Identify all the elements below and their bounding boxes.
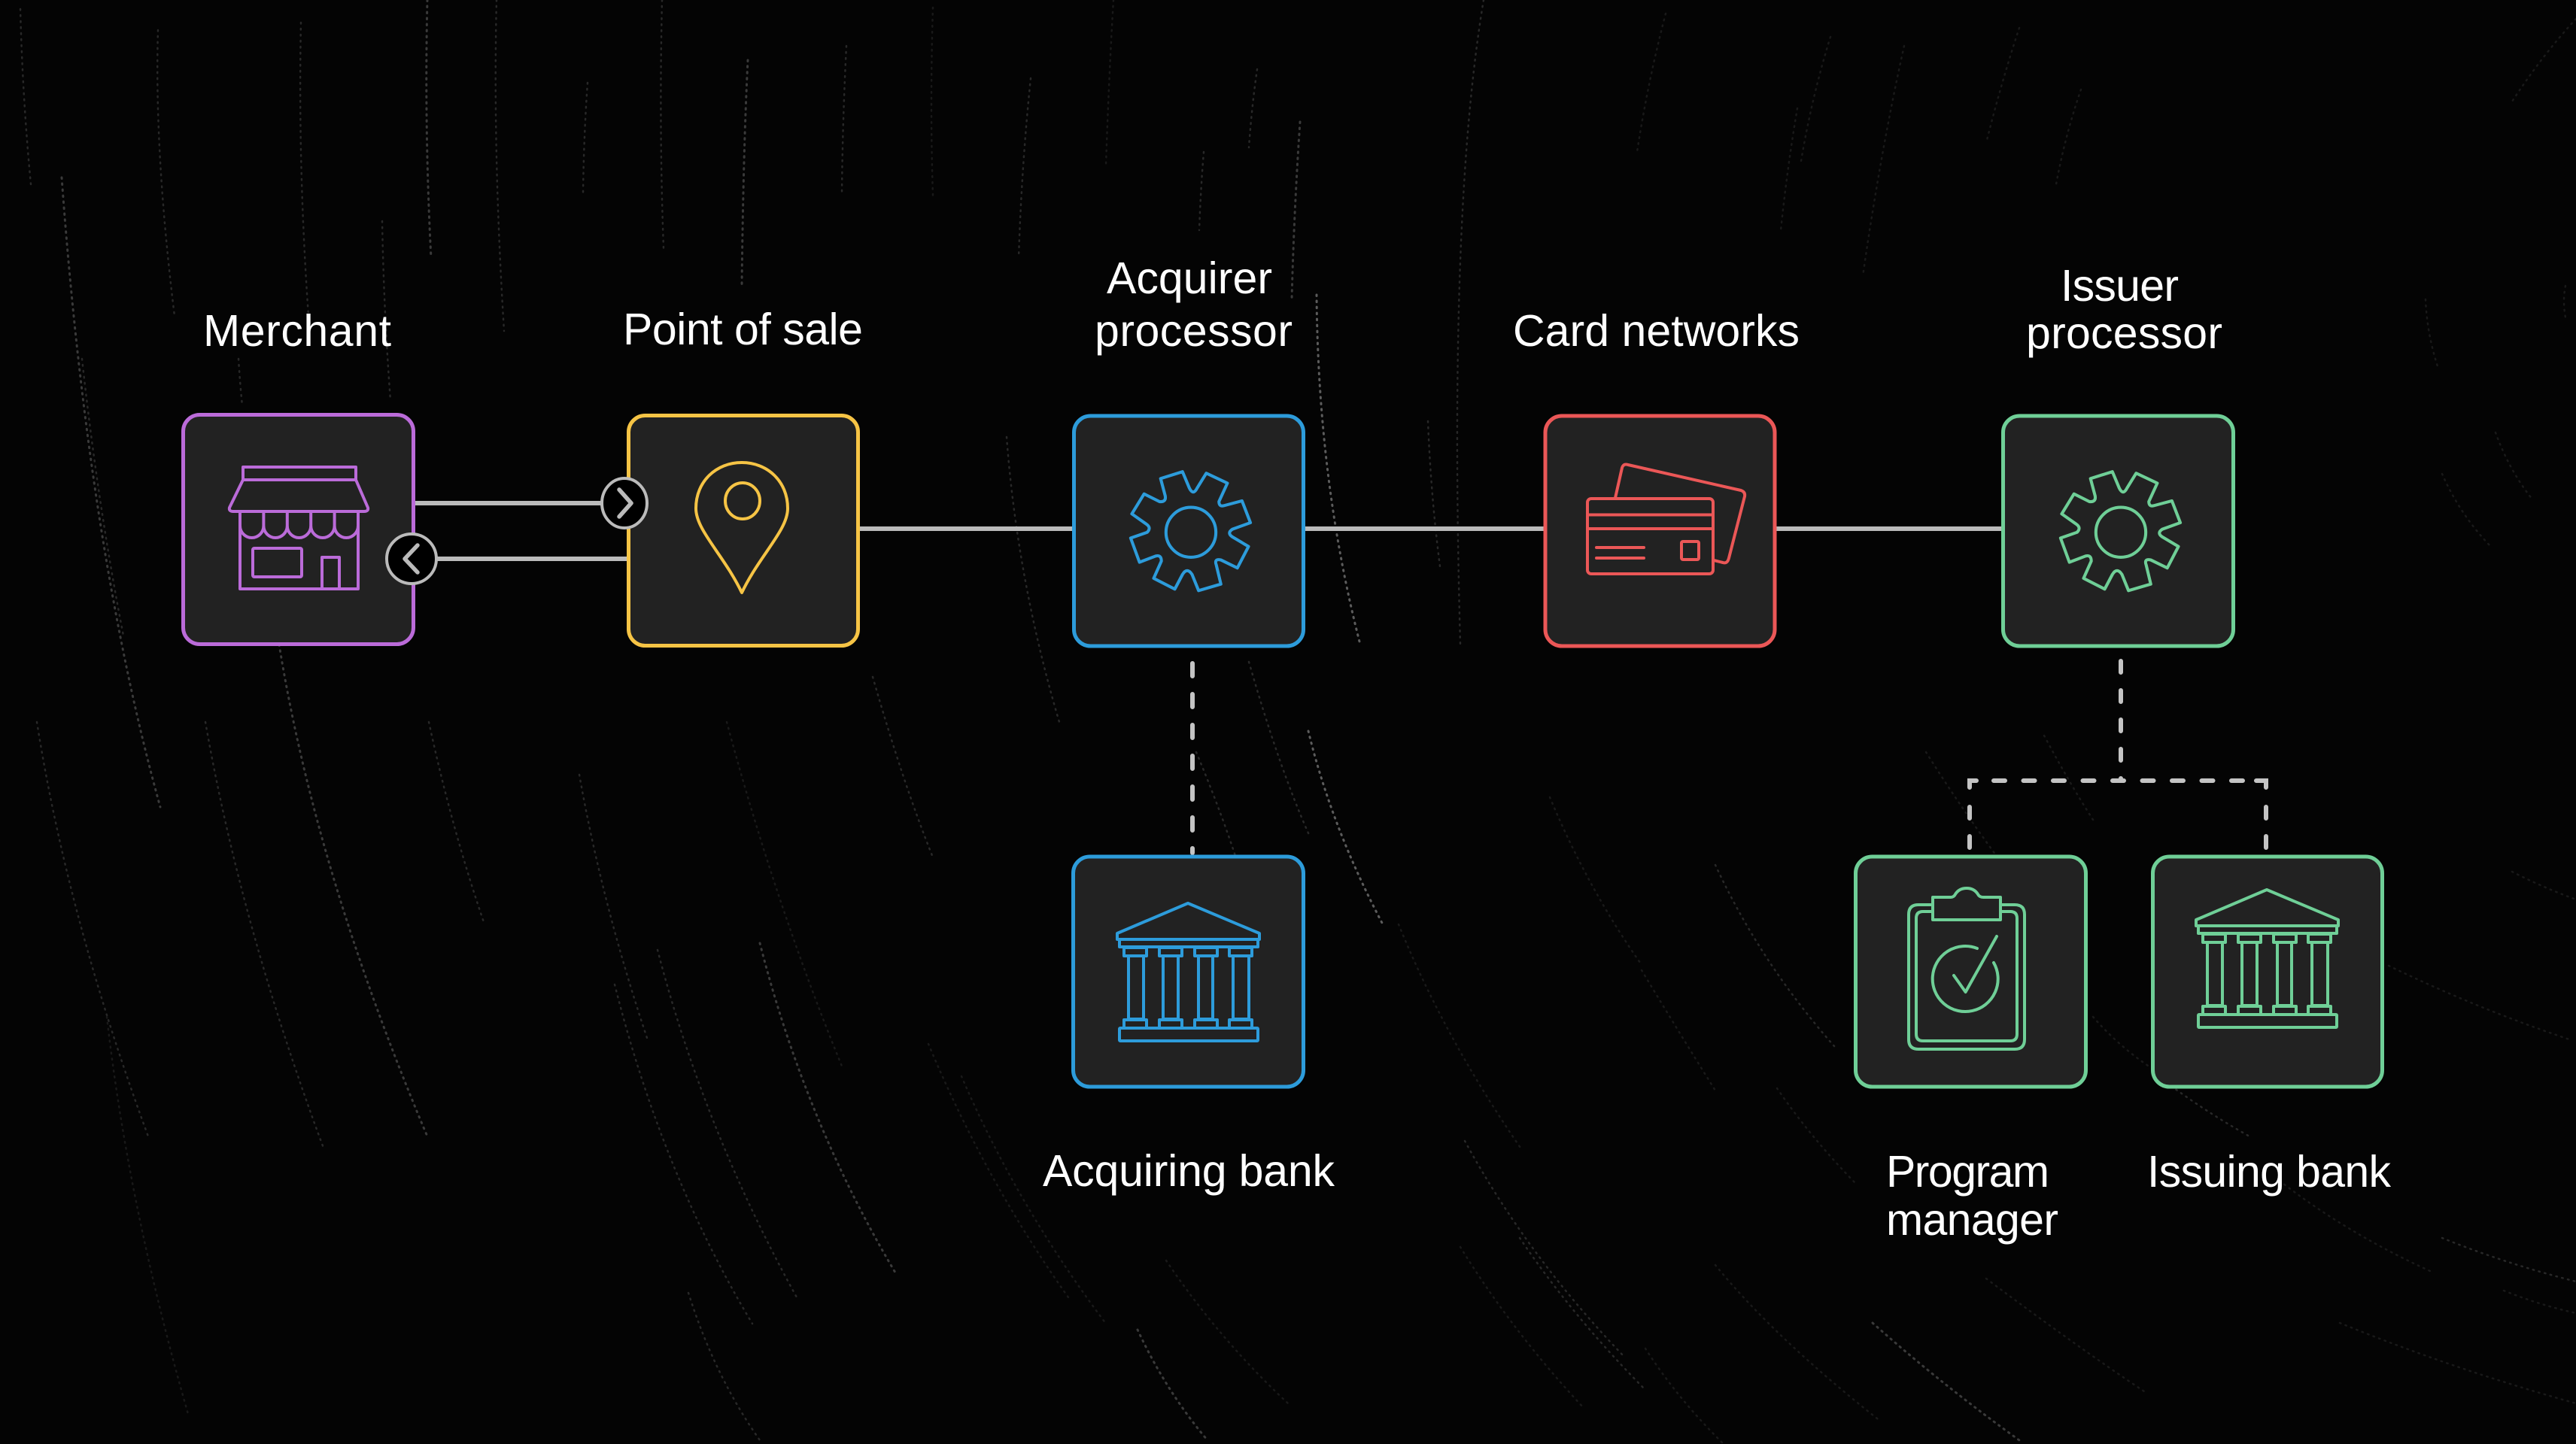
panel: acquirer processor <box>1074 416 1303 646</box>
dashed connector: acquirer processor to acquiring bank <box>1190 663 1195 853</box>
label: issuing bank: Issuing bank <box>2147 1147 2391 1197</box>
arrow: right chevron badge <box>602 478 647 528</box>
connector: point of sale to acquirer processor <box>860 526 1072 531</box>
icon: gear <box>2061 472 2180 590</box>
icon: clipboard with check <box>1909 888 2025 1049</box>
panel: card networks <box>1545 416 1775 646</box>
icon: gear <box>1131 472 1250 590</box>
dashed connector: issuer processor to program manager and issuing bank <box>1970 661 2266 848</box>
panel: merchant <box>184 415 414 644</box>
panel: point of sale <box>629 415 858 645</box>
connector: merchant to point of sale <box>415 501 602 505</box>
label: acquirer processor: Acquirer <box>1107 253 1272 303</box>
connector: card networks to issuer processor <box>1776 526 2001 531</box>
label: program manager: manager <box>1886 1195 2058 1245</box>
icon: store <box>229 467 368 589</box>
label: issuer processor: processor <box>2026 308 2222 358</box>
panel: issuing bank <box>2153 857 2382 1087</box>
label: issuer processor: Issuer <box>2061 261 2179 311</box>
label: merchant: Merchant <box>203 306 391 356</box>
label: card networks: Card networks <box>1513 306 1800 356</box>
label: acquirer processor <box>1095 253 1293 356</box>
panel: program manager <box>1855 857 2085 1087</box>
panel: issuer processor <box>2003 416 2233 646</box>
arrow: left chevron badge <box>387 534 436 584</box>
label: program manager <box>1886 1147 2058 1245</box>
icon: payment cards <box>1587 465 1745 574</box>
label: program manager: Program <box>1886 1147 2049 1197</box>
icon: bank building <box>1117 903 1259 1041</box>
label: acquiring bank: Acquiring bank <box>1043 1146 1335 1196</box>
label: point of sale: Point of sale <box>623 305 863 354</box>
icon: bank building <box>2196 890 2338 1027</box>
label: acquirer processor: processor <box>1095 306 1293 356</box>
connector: point of sale to merchant <box>437 557 627 561</box>
label: issuer processor <box>2026 261 2222 358</box>
panel: acquiring bank <box>1073 857 1303 1087</box>
icon: location pin <box>696 463 788 593</box>
connector: acquirer processor to card networks <box>1305 526 1544 531</box>
